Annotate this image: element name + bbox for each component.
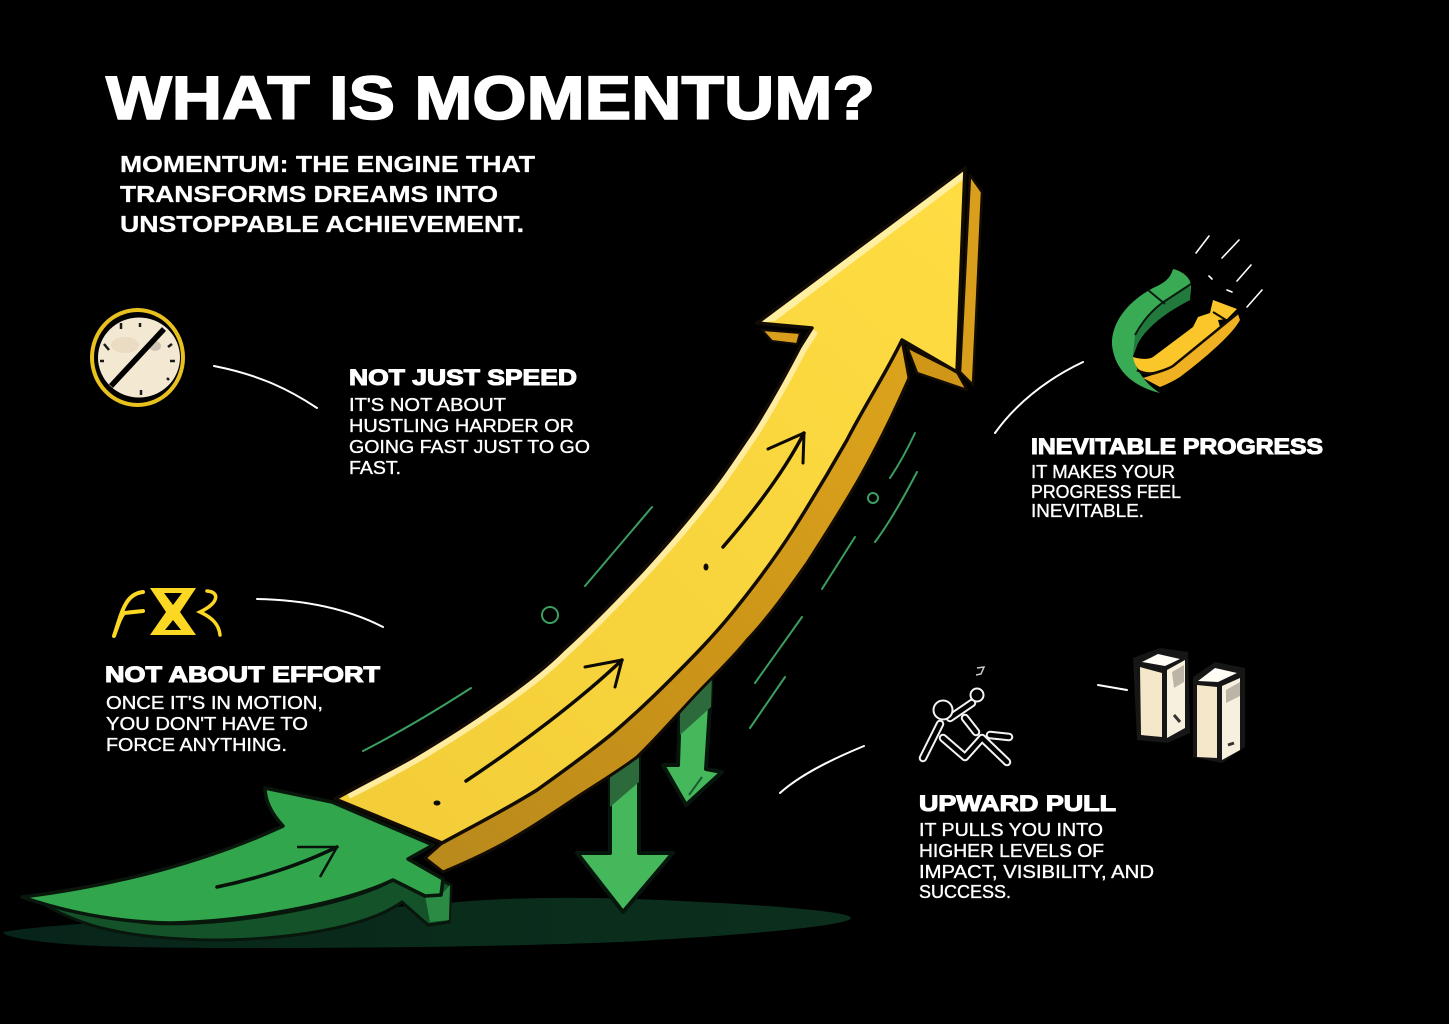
- text block: upward pull: SUCCESS.: [919, 882, 1011, 902]
- text block: not just speed: [349, 365, 590, 478]
- main arrow: shaft and head underside: [425, 175, 982, 872]
- icon: two pillars: [1133, 648, 1245, 763]
- title: WHAT IS MOMENTUM?: [106, 64, 875, 132]
- green arrow base: [22, 788, 451, 940]
- text block: not about effort: ONCE IT'S IN MOTION,: [106, 693, 323, 713]
- text block: not about effort: YOU DON'T HAVE TO: [106, 714, 308, 734]
- text block: inevitable progress: PROGRESS FEEL: [1031, 482, 1181, 502]
- text block: inevitable progress: IT MAKES YOUR: [1031, 462, 1175, 482]
- icon: hourglass with curves: [114, 588, 220, 636]
- ground shadow: [3, 898, 851, 948]
- text block: upward pull: [919, 791, 1154, 902]
- text block: upward pull: UPWARD PULL: [919, 791, 1116, 816]
- subtitle: TRANSFORMS DREAMS INTO: [120, 181, 498, 207]
- main arrow: top face: [335, 168, 965, 843]
- icon: green down arrow large: [577, 750, 673, 912]
- text block: upward pull: IMPACT, VISIBILITY, AND: [919, 862, 1154, 882]
- text block: inevitable progress: [1031, 434, 1323, 521]
- text block: not just speed: FAST.: [349, 458, 401, 478]
- text block: inevitable progress: INEVITABLE PROGRESS: [1031, 434, 1323, 459]
- text block: upward pull: IT PULLS YOU INTO: [919, 820, 1103, 840]
- subtitle: UNSTOPPABLE ACHIEVEMENT.: [120, 211, 524, 237]
- text block: not just speed: GOING FAST JUST TO GO: [349, 437, 590, 457]
- text block: not about effort: NOT ABOUT EFFORT: [105, 662, 380, 687]
- icon: crossed clock: [90, 308, 185, 407]
- text block: inevitable progress: INEVITABLE.: [1031, 501, 1144, 521]
- text block: not just speed: HUSTLING HARDER OR: [349, 416, 574, 436]
- subtitle: [120, 151, 536, 237]
- subtitle: MOMENTUM: THE ENGINE THAT: [120, 151, 536, 177]
- text block: not just speed: IT'S NOT ABOUT: [349, 395, 506, 415]
- text block: not about effort: [105, 662, 380, 755]
- speed streaks: [363, 433, 917, 751]
- text block: not about effort: FORCE ANYTHING.: [106, 735, 287, 755]
- icon: horseshoe magnet: [1112, 236, 1262, 393]
- motion arrows on main arrow: [434, 433, 804, 805]
- text block: upward pull: HIGHER LEVELS OF: [919, 841, 1104, 861]
- text block: not just speed: NOT JUST SPEED: [349, 365, 577, 390]
- connector lines: [214, 362, 1127, 793]
- icon: seated figure: [923, 667, 1009, 762]
- icon: green down arrow small: [663, 675, 722, 805]
